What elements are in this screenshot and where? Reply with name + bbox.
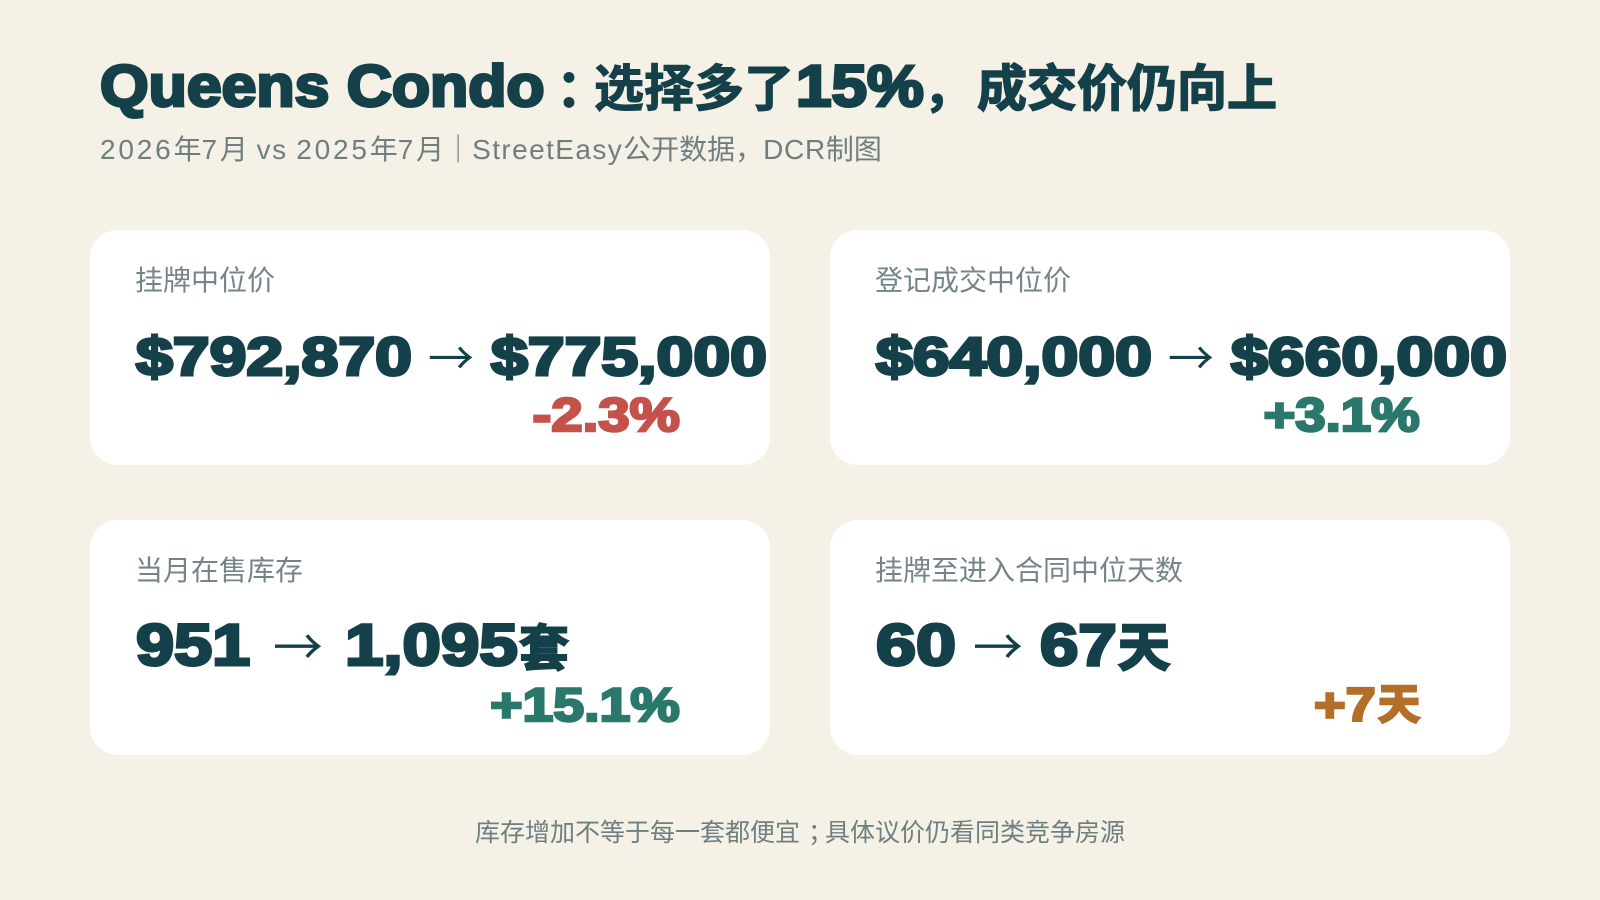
panel: recorded sale median price (830, 230, 1510, 465)
arrow: → (1168, 323, 1214, 389)
value: $792,870 (136, 327, 412, 387)
delta: +3.1% (1264, 388, 1420, 441)
title: 15% (796, 54, 924, 119)
value: 951 (136, 613, 250, 678)
title: ， (923, 49, 973, 121)
title: 选择多了 (594, 49, 794, 121)
title: Queens Condo (100, 54, 545, 119)
panel: listing median price (90, 230, 770, 465)
title: 成交价仍向上 (977, 49, 1277, 121)
panel: days to contract (830, 520, 1510, 755)
title (100, 47, 1277, 122)
label: 挂牌至进入合同中位天数 (875, 549, 1183, 589)
arrow: → (428, 323, 474, 389)
delta: -2.3% (533, 388, 680, 441)
label: 当月在售库存 (135, 549, 303, 589)
title: ： (556, 47, 608, 122)
delta: +7 (1314, 678, 1376, 731)
delta: 天 (1378, 671, 1420, 732)
value: 1,095 (345, 613, 518, 678)
label: 登记成交中位价 (875, 259, 1071, 299)
delta: +15.1% (490, 678, 680, 731)
unit: 套 (519, 609, 569, 681)
value: $640,000 (876, 327, 1152, 387)
arrow: → (973, 608, 1023, 680)
subtitle: 2026年7月 vs 2025年7月｜StreetEasy公开数据，DCR制图 (100, 134, 882, 165)
value: 67 (1040, 613, 1117, 678)
arrow: → (273, 608, 323, 680)
unit: 天 (1118, 606, 1170, 681)
value: $775,000 (491, 327, 767, 387)
value: 60 (876, 613, 956, 678)
label: 挂牌中位价 (135, 259, 275, 299)
value: $660,000 (1231, 327, 1507, 387)
delta (1314, 671, 1422, 732)
panel: monthly inventory (90, 520, 770, 755)
footnote: 库存增加不等于每一套都便宜 ；具体议价仍看同类竞争房源 (475, 813, 1125, 849)
